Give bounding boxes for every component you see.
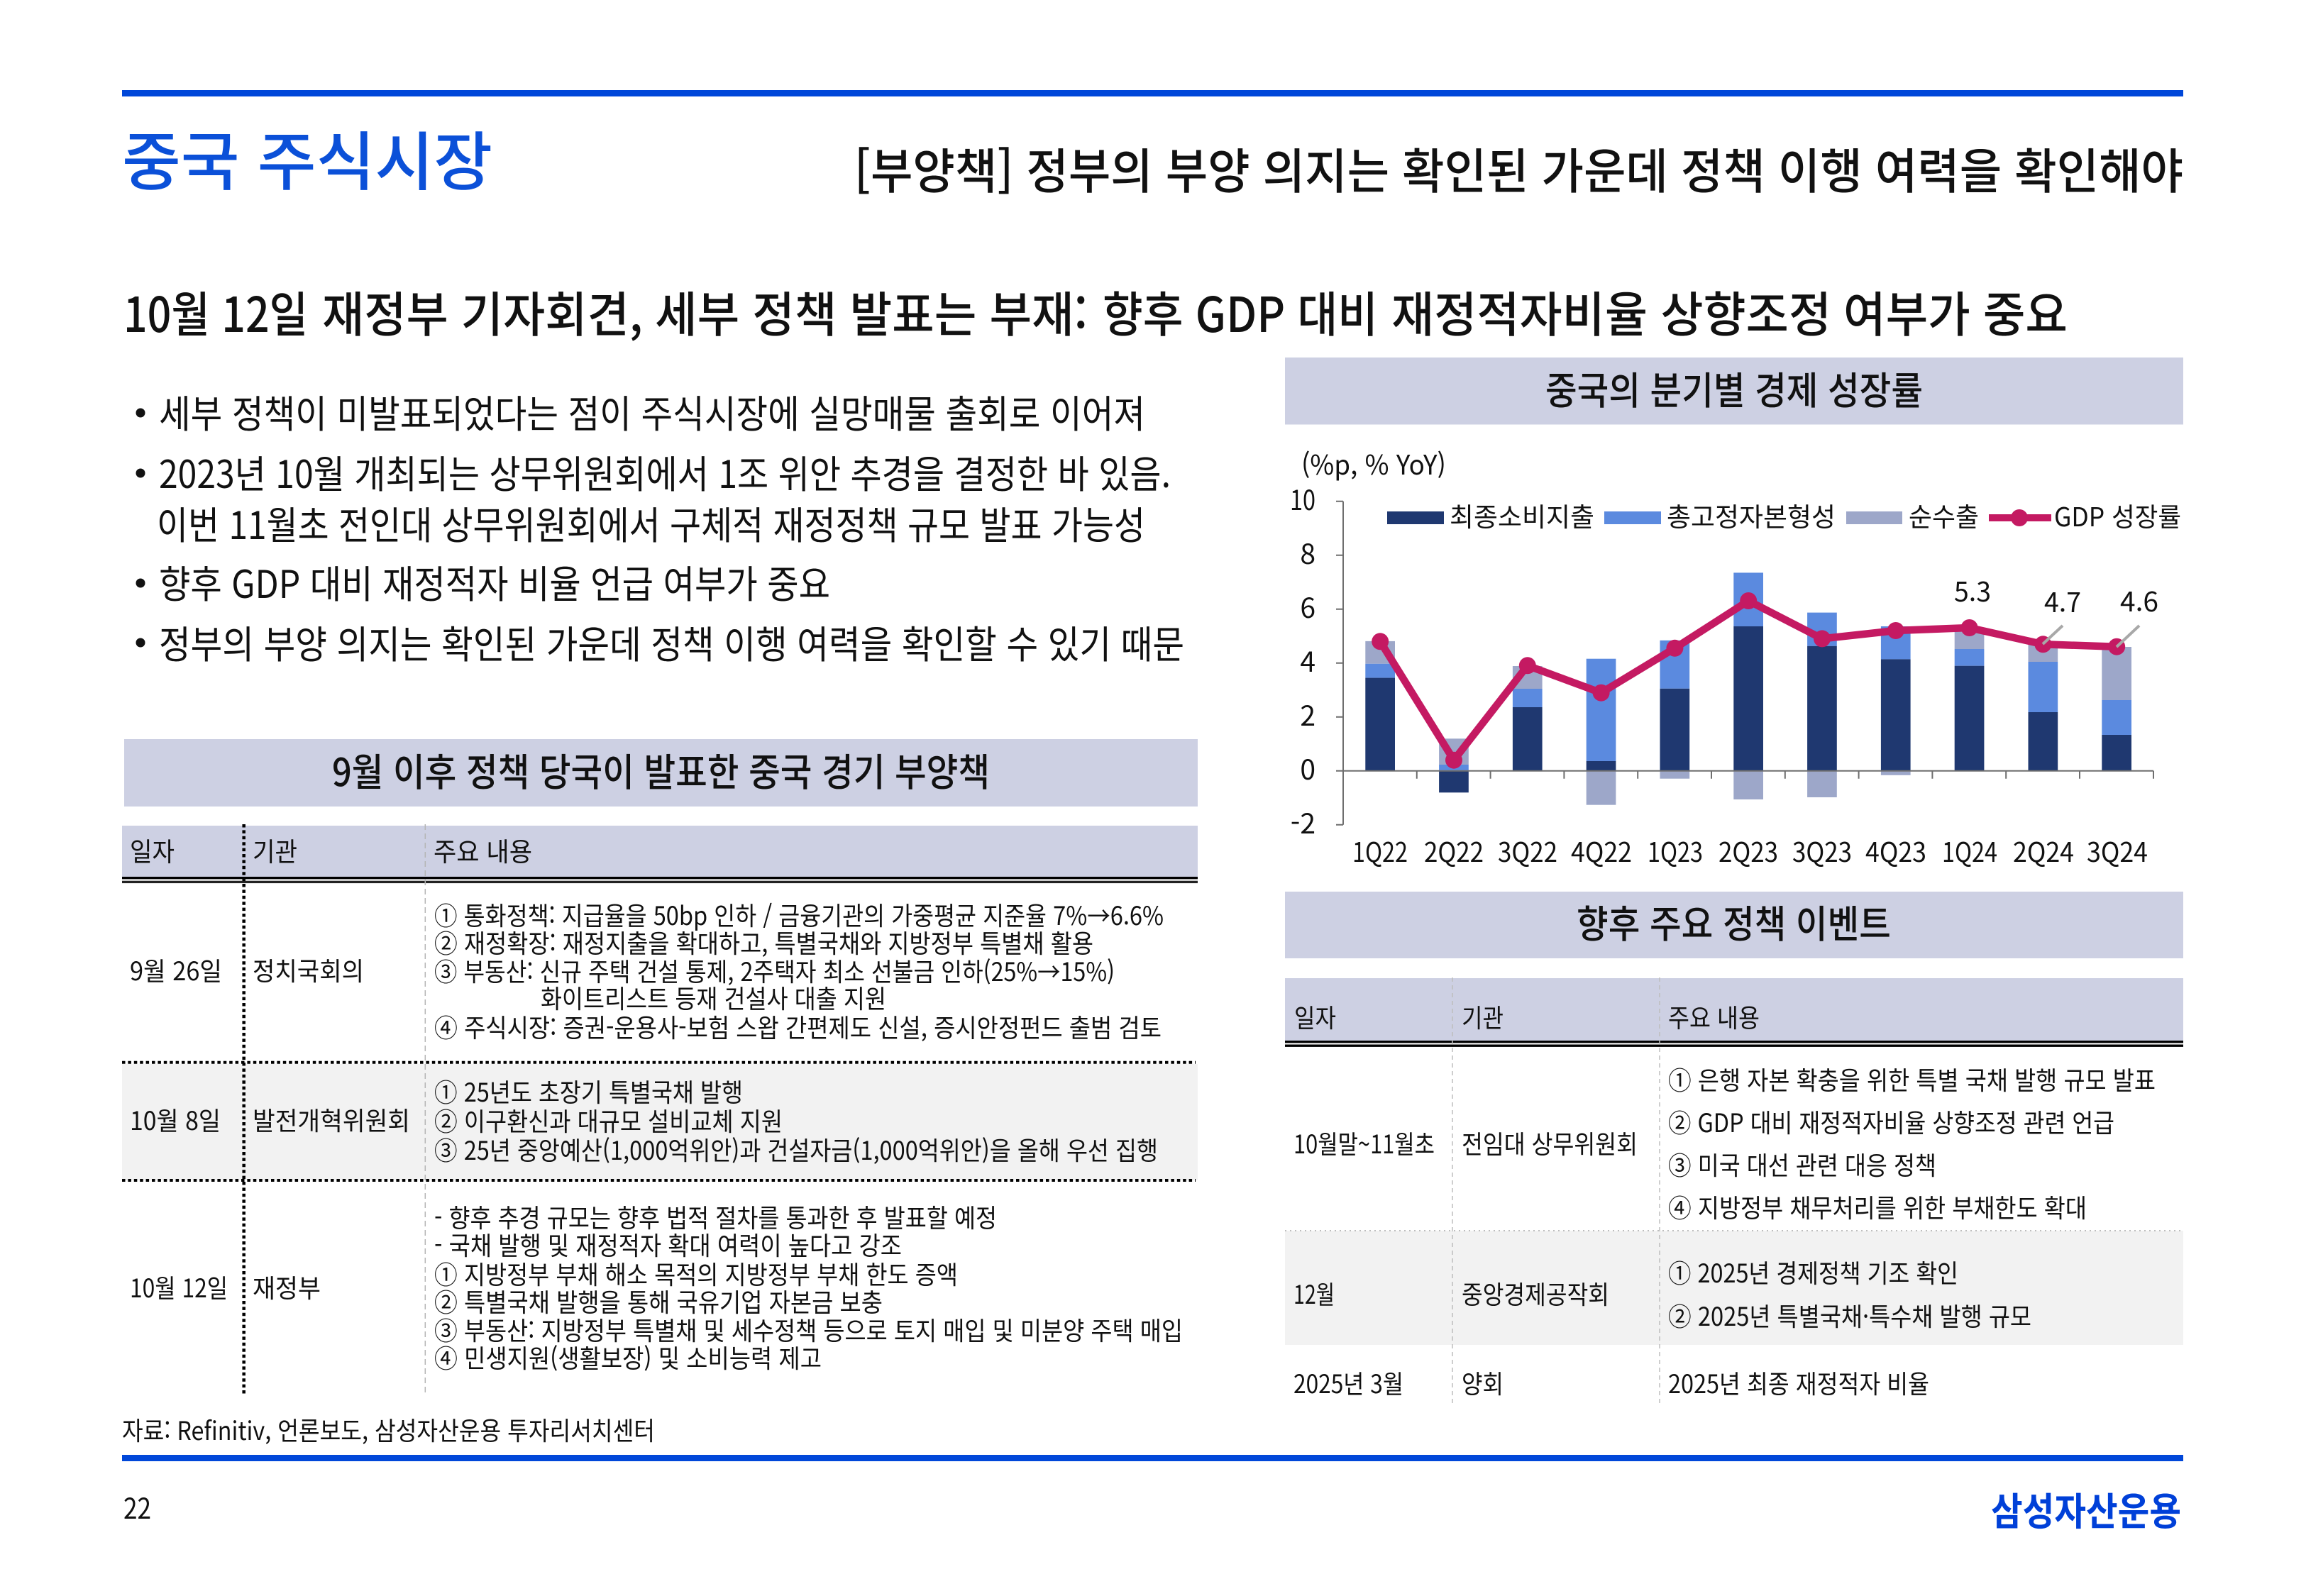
row: 9월 26일: 9월 26일 — [130, 951, 222, 988]
row: 10월 12일 — [130, 1198, 1183, 1375]
headline: 향후 GDP 대비 — [1103, 276, 1378, 346]
row: 12월: 12월 — [1293, 1275, 1335, 1312]
x-axis labels: 2Q22 — [1424, 831, 1484, 870]
row: 10월 8일: ③ 25년 중앙예산(1,000억위안)과 건설자금(1,000억위안)을 올해 우선 집행 — [434, 1131, 1158, 1168]
table header row — [1294, 998, 1760, 1035]
table header row: 일자 — [130, 831, 175, 869]
legend — [1387, 496, 2181, 534]
row: 9월 26일 — [130, 896, 1164, 1045]
data labels: 5.3 — [1954, 570, 1991, 609]
table header row — [130, 831, 532, 869]
bars: gross capital formation — [1365, 572, 2131, 771]
bars: final consumption — [1365, 626, 2131, 792]
bullet list — [136, 383, 1184, 670]
panel: stimulus table heading: 9월 이후 정책 당국이 발표한 중국 경기 부양책 — [332, 741, 990, 797]
row: 12월: 중앙경제공작회 — [1462, 1275, 1609, 1312]
x-axis labels: 3Q23 — [1792, 831, 1852, 870]
y-axis labels: 0 — [1300, 748, 1315, 788]
row: 9월 26일: ④ 주식시장: 증권-운용사-보험 스왑 간편제도 신설, 증시안정펀드 출범 검토 — [434, 1008, 1162, 1045]
x-axis labels: 4Q23 — [1865, 831, 1926, 870]
row: 2025년 3월: 2025년 3월 — [1293, 1364, 1403, 1401]
data labels: 4.6 — [2120, 580, 2158, 619]
row: 2025년 3월 — [1293, 1364, 1929, 1401]
data labels: 4.7 — [2044, 581, 2081, 620]
row: 2025년 3월: 양회 — [1462, 1364, 1504, 1401]
x-axis labels — [1352, 831, 2148, 870]
row: 9월 26일: ② 재정확장: 재정지출을 확대하고, 특별국채와 지방정부 특별채 활용 — [434, 924, 1093, 960]
row: 10월 12일: ① 지방정부 부채 해소 목적의 지방정부 부채 한도 증액 — [434, 1255, 958, 1292]
source note: 자료: Refinitiv, 언론보도, 삼성자산운용 투자리서치센터 — [122, 1411, 655, 1448]
row: 12월 — [1293, 1253, 2031, 1334]
x-axis labels: 3Q22 — [1498, 831, 1557, 870]
x-axis labels: 2Q24 — [2013, 831, 2074, 870]
row: 10월말~11월초: ② GDP 대비 재정적자비율 상향조정 관련 언급 — [1668, 1103, 2114, 1140]
headline: 재정적자비율 상향조정 — [1391, 276, 1831, 346]
row: 9월 26일: 화이트리스트 등재 건설사 대출 지원 — [541, 979, 886, 1016]
row: 9월 26일: 정치국회의 — [253, 951, 364, 988]
row: 10월말~11월초: ① 은행 자본 확충을 위한 특별 국채 발행 규모 발표 — [1668, 1060, 2156, 1097]
data labels — [1954, 570, 2158, 647]
bars: net exports — [1365, 628, 2131, 805]
bullet list: 향후 GDP 대비 재정적자 비율 언급 여부가 중요 — [159, 553, 830, 609]
row: 9월 26일: ③ 부동산: 신규 주택 건설 통제, 2주택자 최소 선불금 인하(25%→15%) — [434, 952, 1115, 989]
row: 10월 12일: ② 특별국채 발행을 통해 국유기업 자본금 보충 — [434, 1282, 883, 1319]
panel: stimulus table heading — [124, 739, 1198, 807]
x-axis labels: 2Q23 — [1719, 831, 1778, 870]
panel: events table heading — [1285, 892, 2183, 958]
bullet list: 세부 정책이 미발표되었다는 점이 주식시장에 실망매물 출회로 이어져 — [159, 383, 1145, 439]
headline: 여부가 중요 — [1843, 276, 2068, 346]
page number: 22 — [123, 1486, 151, 1527]
y-axis labels: 4 — [1300, 641, 1315, 680]
row: 10월 8일 — [130, 1073, 1158, 1168]
row: 10월 12일: ④ 민생지원(생활보장) 및 소비능력 제고 — [434, 1339, 822, 1375]
bullet list: 2023년 10월 개최되는 상무위원회에서 1조 위안 추경을 결정한 바 있음. — [159, 443, 1171, 499]
title: 중국 주식시장 — [122, 111, 492, 203]
axes — [1336, 501, 2153, 825]
y-axis labels — [1290, 479, 1315, 842]
y-axis labels: -2 — [1291, 802, 1315, 842]
x-axis labels: 1Q23 — [1648, 831, 1703, 870]
row: 10월 12일: ③ 부동산: 지방정부 특별채 및 세수정책 등으로 토지 매입 및 미분양 주택 매입 — [434, 1311, 1183, 1348]
table header row: 기관 — [253, 831, 297, 869]
legend: 총고정자본형성 — [1667, 496, 1836, 534]
row: 12월: ② 2025년 특별국채·특수채 발행 규모 — [1668, 1297, 2031, 1334]
row: 10월 8일: 10월 8일 — [130, 1101, 221, 1138]
row: 10월말~11월초: 10월말~11월초 — [1293, 1124, 1435, 1161]
chart: quarterly GDP growth contributions — [1290, 443, 2181, 870]
table: stimulus measures — [122, 824, 1198, 1395]
row: 10월말~11월초: 전임대 상무위원회 — [1462, 1124, 1638, 1161]
headline: 재정부 기자회견, — [322, 276, 643, 346]
table header row: 기관 — [1462, 998, 1504, 1035]
bullet list: 정부의 부양 의지는 확인된 가운데 정책 이행 여력을 확인할 수 있기 때문 — [159, 614, 1184, 670]
table header row: 일자 — [1294, 998, 1336, 1035]
row: 10월 8일: 발전개혁위원회 — [253, 1101, 410, 1138]
legend: GDP 성장률 — [2054, 496, 2181, 534]
panel: chart heading: 중국의 분기별 경제 성장률 — [1545, 360, 1923, 416]
x-axis labels: 1Q24 — [1942, 831, 1997, 870]
headline — [123, 276, 2068, 346]
row: 2025년 3월: 2025년 최종 재정적자 비율 — [1668, 1364, 1929, 1401]
x-axis labels: 4Q22 — [1571, 831, 1632, 870]
logo wordmark: 삼성자산운용 — [1991, 1480, 2181, 1536]
headline: 세부 정책 발표는 부재: — [655, 276, 1088, 346]
x-axis labels: 1Q22 — [1352, 831, 1408, 870]
legend: 최종소비지출 — [1450, 496, 1594, 534]
y-axis labels: 8 — [1300, 533, 1315, 572]
table: upcoming policy events — [1285, 977, 2183, 1404]
row: 10월 12일: - 향후 추경 규모는 향후 법적 절차를 통과한 후 발표할 예정 — [434, 1198, 997, 1235]
row: 10월말~11월초: ④ 지방정부 채무처리를 위한 부채한도 확대 — [1668, 1188, 2087, 1225]
row: 12월: ① 2025년 경제정책 기조 확인 — [1668, 1253, 1958, 1290]
row: 10월 8일: ② 이구환신과 대규모 설비교체 지원 — [434, 1102, 783, 1138]
row: 10월 12일: 재정부 — [253, 1268, 321, 1305]
y-axis labels: 2 — [1300, 694, 1315, 734]
GDP growth line — [1372, 592, 2125, 769]
y-axis labels: 6 — [1300, 587, 1315, 626]
legend: 순수출 — [1909, 496, 1979, 534]
unit label: (%p, % YoY) — [1301, 443, 1446, 482]
headline: 10월 12일 — [123, 276, 308, 346]
y-axis labels: 10 — [1290, 479, 1315, 519]
x-axis labels: 3Q24 — [2087, 831, 2148, 870]
table header row: 주요 내용 — [434, 831, 532, 869]
subtitle: [부양책] 정부의 부양 의지는 확인된 가운데 정책 이행 여력을 확인해야 — [854, 133, 2183, 203]
row: 10월 8일: ① 25년도 초장기 특별국채 발행 — [434, 1073, 743, 1109]
row: 9월 26일: ① 통화정책: 지급율을 50bp 인하 / 금융기관의 가중평균 지준율 7%→6.6% — [434, 896, 1164, 933]
panel: chart heading — [1285, 358, 2183, 424]
bullet list: 이번 11월초 전인대 상무위원회에서 구체적 재정정책 규모 발표 가능성 — [157, 494, 1145, 550]
row: 10월말~11월초: ③ 미국 대선 관련 대응 정책 — [1668, 1146, 1936, 1182]
row: 10월 12일: 10월 12일 — [130, 1268, 228, 1305]
row: 10월말~11월초 — [1293, 1060, 2156, 1225]
row: 10월 12일: - 국채 발행 및 재정적자 확대 여력이 높다고 강조 — [434, 1226, 902, 1263]
panel: events table heading: 향후 주요 정책 이벤트 — [1577, 893, 1891, 949]
table header row: 주요 내용 — [1668, 998, 1760, 1035]
